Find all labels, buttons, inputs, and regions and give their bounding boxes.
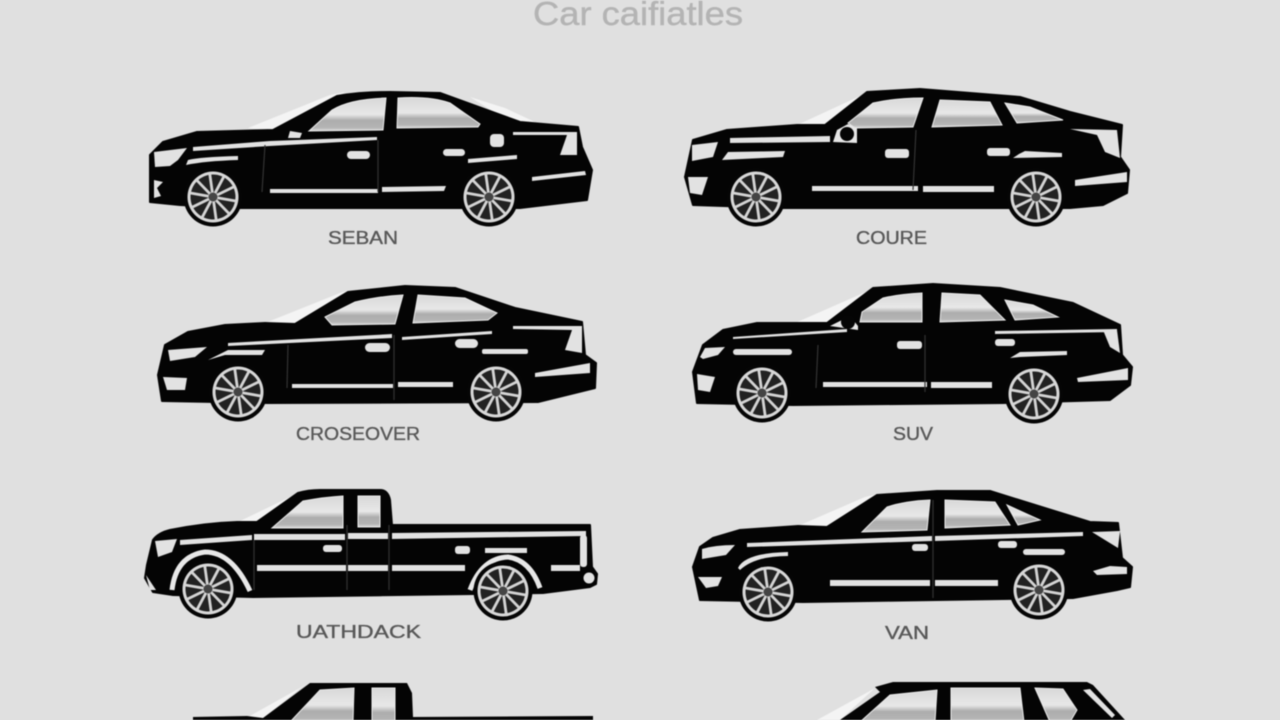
wheel: rear	[466, 362, 526, 422]
car: sedan	[150, 92, 592, 226]
car: pickup (hatchback label)	[145, 490, 597, 620]
wheel: front	[184, 168, 242, 226]
wheel: rear	[1004, 364, 1064, 424]
wheel: front	[178, 560, 238, 618]
wheel: rear	[1006, 168, 1066, 226]
wheel arch: front	[172, 552, 250, 591]
label: coupe: COURE	[856, 228, 927, 248]
car: wagon, cropped at bottom	[817, 682, 1125, 720]
wheel: front	[726, 168, 786, 226]
wheel arch: rear	[470, 557, 540, 590]
car: coupe	[685, 89, 1129, 226]
label: hatchback: UATHDACK	[296, 622, 421, 642]
wheel: rear	[1010, 560, 1068, 620]
car: suv	[693, 284, 1132, 424]
car: crossover	[158, 286, 596, 422]
wheel: rear	[474, 562, 532, 620]
wheel: rear	[460, 168, 518, 226]
label: crossover: CROSEOVER	[296, 424, 420, 444]
car: van (sedan shape)	[693, 491, 1132, 622]
label: suv: SUV	[893, 424, 933, 444]
car: pickup, cropped at bottom	[193, 683, 593, 720]
wheel: front	[738, 562, 798, 622]
wheel: front	[208, 362, 268, 422]
wheel: front	[732, 364, 792, 422]
label: sedan: SEBAN	[328, 228, 398, 248]
label: van: VAN	[885, 623, 929, 643]
